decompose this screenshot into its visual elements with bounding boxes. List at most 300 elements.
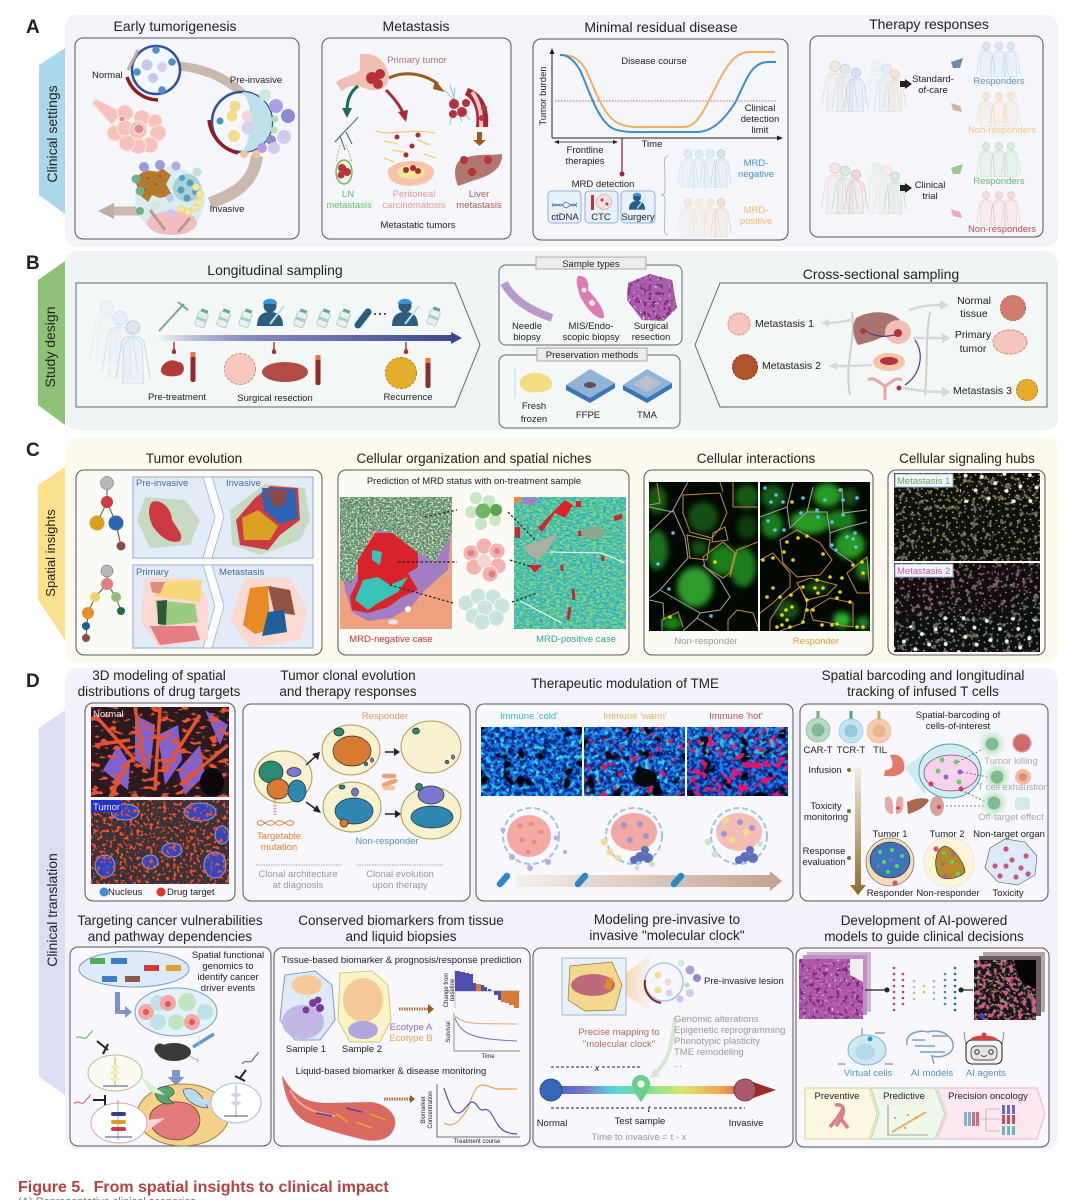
line chart: tumor burden over time: detection xyxy=(741,114,779,125)
side tab: clinical settings: Clinical settings xyxy=(44,85,60,183)
label: peritoneal carcinomatosis: carcinomatosis xyxy=(382,200,446,211)
brace xyxy=(661,156,668,235)
frame xyxy=(796,948,1049,1147)
tissue: needle biopsy: Needle xyxy=(512,321,542,332)
label: tumor killing: Tumor killing xyxy=(984,756,1038,767)
legend: nucleus and drug target: Drug target xyxy=(167,887,215,898)
label: immune warm: Immune 'warm' xyxy=(603,711,667,722)
recurrence specimen xyxy=(386,358,430,388)
label: targetable mutation: Targetable xyxy=(257,831,301,842)
label: LN metastasis: metastasis xyxy=(326,200,372,211)
card: CTC xyxy=(585,191,618,223)
heading: cellular signaling hubs: Cellular signaling hubs xyxy=(899,451,1035,466)
panel: early tumorigenesis xyxy=(75,18,299,239)
label: toxicity monitoring: monitoring xyxy=(804,812,848,823)
tumor blob: metastasis 2 xyxy=(732,354,758,380)
pre-invasive to invasive panel xyxy=(133,477,313,558)
arrow heads xyxy=(821,300,951,397)
leaf arrows xyxy=(951,58,963,112)
labels: sampling points: Recurrence xyxy=(383,392,433,403)
label: spatial functional genomics: genomics to xyxy=(202,961,254,972)
arrow head: invasion xyxy=(98,203,114,219)
label: clonal architecture: Clonal architecture xyxy=(258,869,338,880)
micrograph: normal xyxy=(91,707,229,797)
frame xyxy=(322,38,511,239)
multiplex image stack xyxy=(974,952,1045,1020)
icons: therapy pills xyxy=(500,876,681,884)
legend: nucleus and drug target xyxy=(100,887,215,898)
cell ellipse xyxy=(135,988,217,1036)
letter D: D xyxy=(26,671,40,692)
waterfall chart: baseline xyxy=(450,978,456,1001)
labels: AI tools: Virtual cells xyxy=(844,1068,892,1079)
line chart: tumor burden over time: Clinical xyxy=(745,103,775,114)
gene constructs ellipse xyxy=(79,951,189,987)
panel: longitudinal sampling xyxy=(76,262,480,407)
frontline therapies span: therapies xyxy=(565,156,605,167)
niche cluster: red cells xyxy=(463,538,506,582)
icon: surgeon 1 xyxy=(257,299,284,326)
clone: responder before therapy xyxy=(322,725,380,775)
card: surgery xyxy=(621,191,655,223)
micrograph: tumor xyxy=(91,800,229,884)
MRD detection pointer xyxy=(620,138,624,176)
survival chart: Survival xyxy=(446,1021,452,1043)
label: clonal architecture: at diagnosis xyxy=(273,880,324,891)
heading: tumor evolution: Tumor evolution xyxy=(146,451,242,466)
icon: pill xyxy=(358,312,368,325)
cell: TCR-T xyxy=(837,711,865,756)
peritoneal carcinomatosis xyxy=(376,131,436,186)
heading: therapeutic modulation: Therapeutic modulation of TME xyxy=(531,676,719,691)
panel: tumor evolution xyxy=(76,451,322,655)
icon: biopsy forceps xyxy=(159,302,188,331)
label: metastasis 2: Metastasis 2 xyxy=(762,360,821,372)
label: primary tumor: Primary xyxy=(955,329,992,341)
micrograph: metastasis 1: Metastasis 1 xyxy=(897,476,950,487)
sample 2 xyxy=(338,971,391,1055)
label: clinical trial: Clinical xyxy=(915,180,945,191)
heading: molecular clock: invasive "molecular clock" xyxy=(589,928,745,943)
label: liver metastasis: Liver xyxy=(469,189,489,200)
label: normal tissue: tissue xyxy=(960,308,988,320)
tumor sphere: cold xyxy=(500,808,567,871)
cell: CAR-T: CAR-T xyxy=(803,745,833,756)
stomach with primary tumor xyxy=(336,54,389,92)
label: off-target effect: Off-target effect xyxy=(978,812,1044,823)
vessel with tumor cells xyxy=(445,85,488,127)
label: MRD-positive: positive xyxy=(740,216,772,227)
label: pre-invasive: Pre-invasive xyxy=(230,75,282,86)
arrows: progression xyxy=(110,66,257,211)
line chart: tumor burden over time xyxy=(538,48,783,150)
panel: targeting cancer vulnerabilities xyxy=(70,913,271,1146)
subtitle: prediction of MRD status: Prediction of MRD status with on-treatment sample xyxy=(367,476,581,487)
non-target organ xyxy=(985,839,1037,885)
FFPE block xyxy=(566,369,615,421)
legend: nucleus and drug target: Nucleus xyxy=(108,887,143,898)
label: normal tissue: Normal xyxy=(957,295,991,307)
legend: ecotypes: Ecotype B xyxy=(389,1033,433,1044)
niche cluster: teal cells xyxy=(458,588,510,630)
label: response evaluation: evaluation xyxy=(802,857,846,868)
micrograph: non-responder xyxy=(646,482,759,631)
panel: cellular signaling hubs xyxy=(888,451,1045,655)
people: clinical responders xyxy=(977,143,1020,177)
arrow: to peritoneum xyxy=(386,90,408,122)
frame xyxy=(800,704,1048,901)
panel: molecular clock xyxy=(533,912,793,1147)
biomarker concentration chart: Biomarker xyxy=(421,1096,427,1124)
label: peritoneal carcinomatosis: Peritoneal xyxy=(393,189,435,200)
curved arrow: mapping xyxy=(650,1018,675,1078)
label: primary tumor: tumor xyxy=(960,343,987,355)
chevron: preventive: Preventive xyxy=(815,1091,859,1102)
TMA block xyxy=(623,369,672,421)
zoomed tumor with barcoded cells xyxy=(905,744,981,798)
clone: non-responder before therapy xyxy=(323,782,381,832)
pre-treatment specimen xyxy=(161,352,196,382)
panel: cellular organization and spatial niches xyxy=(338,451,629,655)
normal tissue circle xyxy=(127,46,180,100)
trunk arrow: longitudinal timeline xyxy=(850,768,866,895)
labels: AI tools: AI agents xyxy=(966,1068,1006,1079)
arrow xyxy=(900,79,912,89)
panel: AI-powered models xyxy=(796,913,1049,1147)
label: responder: Responder xyxy=(362,711,408,722)
subtitle: liquid-based biomarker: Liquid-based biomarker & disease monitoring xyxy=(296,1066,486,1077)
panel: metastasis xyxy=(322,18,511,239)
zoom: green pathway xyxy=(88,1055,165,1095)
labels: sampling points xyxy=(148,392,433,404)
label: spatial functional genomics: driver events xyxy=(201,983,255,994)
survival chart: Time xyxy=(481,1054,495,1060)
blood vessel with ctDNA xyxy=(282,1075,395,1141)
heading: metastasis: Metastasis xyxy=(383,18,449,34)
label: clinical trial: trial xyxy=(922,191,938,202)
label: non-responder: Non-responder xyxy=(355,836,419,847)
label: metastasis 1: Metastasis 1 xyxy=(755,318,814,330)
icon: AI brain xyxy=(907,1031,953,1064)
label: non-responders: Non-responders xyxy=(968,125,1036,136)
primary to metastasis panel: Metastasis xyxy=(219,567,265,578)
tissue: MIS/endoscopic biopsy xyxy=(562,276,620,343)
tissue: surgical resection xyxy=(626,273,678,343)
labels: clock stops: Invasive xyxy=(729,1118,763,1129)
label: T cell exhaustion: T cell exhaustion xyxy=(977,782,1049,793)
heading: molecular clock: Modeling pre-invasive to xyxy=(594,912,740,927)
label t: t xyxy=(648,1104,651,1115)
heading: 3D modeling: 3D modeling of spatial xyxy=(92,668,226,683)
heading: spatial barcoding: Spatial barcoding and longitudinal xyxy=(822,668,1024,683)
micrograph: normal: Normal xyxy=(93,709,124,720)
targetable mutation marker xyxy=(257,799,294,825)
label: MRD detection: MRD detection xyxy=(572,179,634,190)
tumor blob: primary tumor xyxy=(993,330,1027,354)
label: pre-invasive lesion: Pre-invasive lesion xyxy=(704,976,784,987)
cell: TCR-T: TCR-T xyxy=(837,745,865,756)
icon: pills xyxy=(384,776,395,788)
tumor blob: normal tissue xyxy=(1000,296,1026,320)
frame xyxy=(243,704,470,901)
heading: conserved biomarkers: and liquid biopsies xyxy=(345,929,457,944)
tissue: surgical resection: Surgical xyxy=(634,321,668,332)
micrograph: tumor: Tumor xyxy=(93,802,120,813)
arrow: to liver xyxy=(473,132,486,146)
clock bar xyxy=(540,1079,776,1101)
zoom: blue pathway xyxy=(195,1083,261,1123)
micrograph: metastasis 2: Metastasis 2 xyxy=(897,566,950,577)
side tab: spatial insights xyxy=(38,467,65,640)
T-bar inhibition marks xyxy=(93,1041,246,1105)
heading: AI-powered models: models to guide clinical decisions xyxy=(824,929,1024,944)
chevron: predictive xyxy=(871,1088,945,1139)
chevron: predictive: Predictive xyxy=(883,1091,925,1102)
label: clonal evolution: Clonal evolution xyxy=(366,869,434,880)
micrograph: cold xyxy=(481,727,582,796)
body with organs xyxy=(848,312,930,400)
figure caption title: Figure 5. From spatial insights to clinical impact xyxy=(18,1179,389,1196)
labels: response outcomes: Non-responder xyxy=(916,888,980,899)
lesion section xyxy=(562,958,626,1015)
label: responders: Responders xyxy=(973,76,1025,87)
tumor 1: responder xyxy=(866,838,914,886)
primary to metastasis panel xyxy=(133,565,313,648)
label: spatial-barcoding: Spatial-barcoding of xyxy=(916,710,1001,721)
panel: cross-sectional sampling xyxy=(695,266,1047,407)
labels: organ outcomes: Tumor 2 xyxy=(929,829,965,840)
card: surgery: Surgery xyxy=(621,212,655,223)
label: non-responder: Non-responder xyxy=(674,636,738,647)
labels: response outcomes: Responder xyxy=(867,888,913,899)
niche cluster: green cells xyxy=(464,492,502,530)
sample 1 xyxy=(280,971,335,1055)
panel: preservation methods xyxy=(499,348,680,428)
micrograph: hot xyxy=(687,727,788,796)
tumor sphere: hot xyxy=(704,808,767,864)
labels: organ outcomes: Tumor 1 xyxy=(872,829,908,840)
label: MRD-negative: MRD- xyxy=(744,158,768,169)
letter A: A xyxy=(26,17,40,38)
heading: spatial barcoding: tracking of infused T cells xyxy=(847,684,999,699)
heading: clonal evolution: Tumor clonal evolution xyxy=(280,668,416,683)
zoom cone xyxy=(610,955,650,1010)
frame xyxy=(533,39,788,240)
letter C: C xyxy=(26,440,40,461)
span t xyxy=(551,1107,745,1109)
frame xyxy=(76,470,322,655)
label: standard-of-care: of-care xyxy=(918,85,948,96)
lymph vessels and node xyxy=(335,117,358,184)
pre-invasive to invasive panel: Pre-invasive xyxy=(136,478,188,489)
header: sample types xyxy=(536,257,646,270)
frame xyxy=(644,470,873,655)
clone: responder after therapy xyxy=(401,721,461,773)
labels: response outcomes xyxy=(867,888,1024,899)
label: normal: Normal xyxy=(92,70,123,81)
labels: AI tools: AI models xyxy=(911,1068,953,1079)
label: clonal evolution: upon therapy xyxy=(372,880,428,891)
timeline arrow xyxy=(157,332,462,344)
label: infusion: Infusion xyxy=(808,765,842,776)
heading: minimal residual disease: Minimal residual disease xyxy=(584,19,738,35)
label: LN metastasis: LN xyxy=(342,189,354,200)
panel: clonal evolution xyxy=(243,668,470,901)
heading: cross-sectional sampling: Cross-sectional sampling xyxy=(803,266,959,282)
phylogenetic tree 1 xyxy=(90,476,126,550)
side tab: clinical translation xyxy=(39,710,65,1095)
waterfall chart xyxy=(444,970,520,1008)
label: metastatic tumors: Metastatic tumors xyxy=(381,220,456,231)
sampling arrows xyxy=(828,305,942,392)
side tab: study design xyxy=(38,261,65,425)
line chart: tumor burden over time: Disease course xyxy=(621,56,687,67)
side tab: clinical settings xyxy=(39,48,65,214)
label: spatial functional genomics: identify cancer xyxy=(197,972,259,983)
pre-invasive circle xyxy=(209,89,295,158)
sampling pins xyxy=(172,342,408,354)
panel: conserved biomarkers xyxy=(274,913,530,1146)
arrow: to lymph node xyxy=(342,86,358,118)
arrow: down to tumor xyxy=(168,1070,184,1086)
phylogenetic tree 2 xyxy=(82,565,125,642)
span x xyxy=(551,1066,642,1068)
frame xyxy=(76,283,480,407)
liver metastasis xyxy=(455,154,502,186)
arrow: to vessel xyxy=(389,74,445,92)
label: precise mapping: Precise mapping to xyxy=(578,1027,660,1038)
panel B: study design xyxy=(26,251,1058,430)
people: non-responders xyxy=(977,93,1020,127)
panel C: spatial insights xyxy=(26,438,1058,662)
label: alterations: TME remodeling xyxy=(674,1047,744,1058)
panel: sample types xyxy=(499,257,682,345)
map: MRD-negative case xyxy=(340,497,452,629)
frame xyxy=(274,948,530,1146)
header: preservation methods: Preservation methods xyxy=(546,350,638,361)
labels: clock stops: Test sample xyxy=(615,1116,665,1127)
heading: cellular interactions: Cellular interactions xyxy=(697,451,816,466)
icon: surgeon 2 xyxy=(392,299,419,326)
fresh frozen: frozen xyxy=(521,414,547,425)
icon: virtual cell xyxy=(838,1028,893,1065)
label: immune hot: Immune 'hot' xyxy=(709,711,763,722)
frame xyxy=(533,948,793,1147)
tissue: needle biopsy: biopsy xyxy=(513,332,541,343)
invasive tumor mass xyxy=(132,160,205,235)
side tab: study design: Study design xyxy=(42,307,58,387)
panel: minimal residual disease xyxy=(533,19,788,240)
dashed spans xyxy=(256,864,443,866)
frontline therapies span xyxy=(554,140,618,167)
panel: spatial barcoding xyxy=(800,668,1049,901)
micrograph: responder xyxy=(760,482,870,631)
card: ctDNA xyxy=(548,191,581,223)
people: responders xyxy=(977,43,1020,77)
line chart: tumor burden over time: limit xyxy=(752,125,769,136)
label: invasive: Invasive xyxy=(210,204,244,215)
leaf arrows xyxy=(951,164,963,218)
icon: test sample pin xyxy=(632,1075,650,1102)
zoom: red pathway xyxy=(91,1100,165,1143)
label: MRD-positive: MRD- xyxy=(744,205,768,216)
label: primary tumor: Primary tumor xyxy=(387,55,447,66)
siRNA inhibitors xyxy=(74,1030,258,1104)
dashed connectors xyxy=(390,510,537,603)
surgical resection specimens xyxy=(224,354,320,385)
arrow xyxy=(900,183,912,193)
tissue: MIS/endoscopic biopsy: MIS/Endo- xyxy=(569,321,613,332)
micrograph: warm xyxy=(584,727,685,796)
pre-invasive lesion icon xyxy=(645,960,701,1003)
arrow: to cells xyxy=(115,992,132,1018)
chevron: precision oncology: Precision oncology xyxy=(948,1091,1028,1102)
labels: organ outcomes: Non-target organ xyxy=(973,829,1045,840)
cell: CAR-T xyxy=(803,711,833,756)
effect cells xyxy=(1013,734,1031,810)
timeline dots xyxy=(847,768,851,860)
label: MRD-negative: negative xyxy=(738,169,774,180)
pink acini xyxy=(92,99,166,154)
card: ctDNA: ctDNA xyxy=(551,212,579,223)
heading: conserved biomarkers: Conserved biomarkers from tissue xyxy=(298,913,504,928)
tissue: needle biopsy xyxy=(504,283,552,343)
organs: lung, liver, kidney xyxy=(885,796,944,816)
tumor with subclones xyxy=(137,1084,229,1146)
primary to metastasis panel: Primary xyxy=(136,567,169,578)
standard of care cohort xyxy=(822,61,906,112)
frame xyxy=(888,470,1045,655)
frame xyxy=(476,704,793,901)
tissue: MIS/endoscopic biopsy: scopic biopsy xyxy=(562,332,620,343)
heading: clonal evolution: and therapy responses xyxy=(279,684,417,699)
frame xyxy=(75,38,299,239)
sample 2: Sample 2 xyxy=(342,1044,382,1055)
tumor sphere: warm xyxy=(600,808,662,870)
label: toxicity monitoring: Toxicity xyxy=(810,801,842,812)
labels: AI tools xyxy=(844,1068,1006,1079)
frontline therapies span: Frontline xyxy=(567,145,603,156)
side tab: spatial insights: Spatial insights xyxy=(43,509,58,597)
side tab: clinical translation: Clinical translation xyxy=(44,853,60,967)
label: clinical responders: Responders xyxy=(973,176,1025,187)
panel A: clinical settings xyxy=(26,15,1058,247)
arrows: clonal paths xyxy=(306,752,397,814)
fresh frozen xyxy=(515,368,552,425)
micrograph: metastasis 1 xyxy=(894,473,1040,561)
micrograph: metastasis 2 xyxy=(894,563,1040,652)
heading: therapy responses: Therapy responses xyxy=(869,16,989,32)
frame xyxy=(338,470,629,655)
label x: x xyxy=(594,1063,601,1074)
label: time to invasive: Time to invasive = t - x xyxy=(592,1132,687,1143)
dotted arrow: to liquid chart xyxy=(384,1095,415,1103)
people: MRD-negative xyxy=(678,150,731,188)
icon: stomach xyxy=(884,755,904,776)
icon: mouse and syringe xyxy=(154,1034,214,1062)
letter B: B xyxy=(26,253,40,274)
label: spatial-barcoding: cells-of-interest xyxy=(926,721,991,732)
survival chart xyxy=(446,1013,520,1060)
label: immune cold: Immune 'cold' xyxy=(500,711,558,722)
subtitle: tissue-based biomarker: Tissue-based biomarker & prognosis/response prediction xyxy=(282,955,521,966)
people: MRD-positive xyxy=(678,199,731,237)
FFPE block: FFPE xyxy=(576,410,600,421)
T cells with glow xyxy=(981,733,1008,814)
label: response evaluation: Response xyxy=(803,846,845,857)
dotted arrow: to tissue charts xyxy=(399,1004,434,1014)
biomarker concentration chart: Treatment course xyxy=(454,1139,501,1145)
